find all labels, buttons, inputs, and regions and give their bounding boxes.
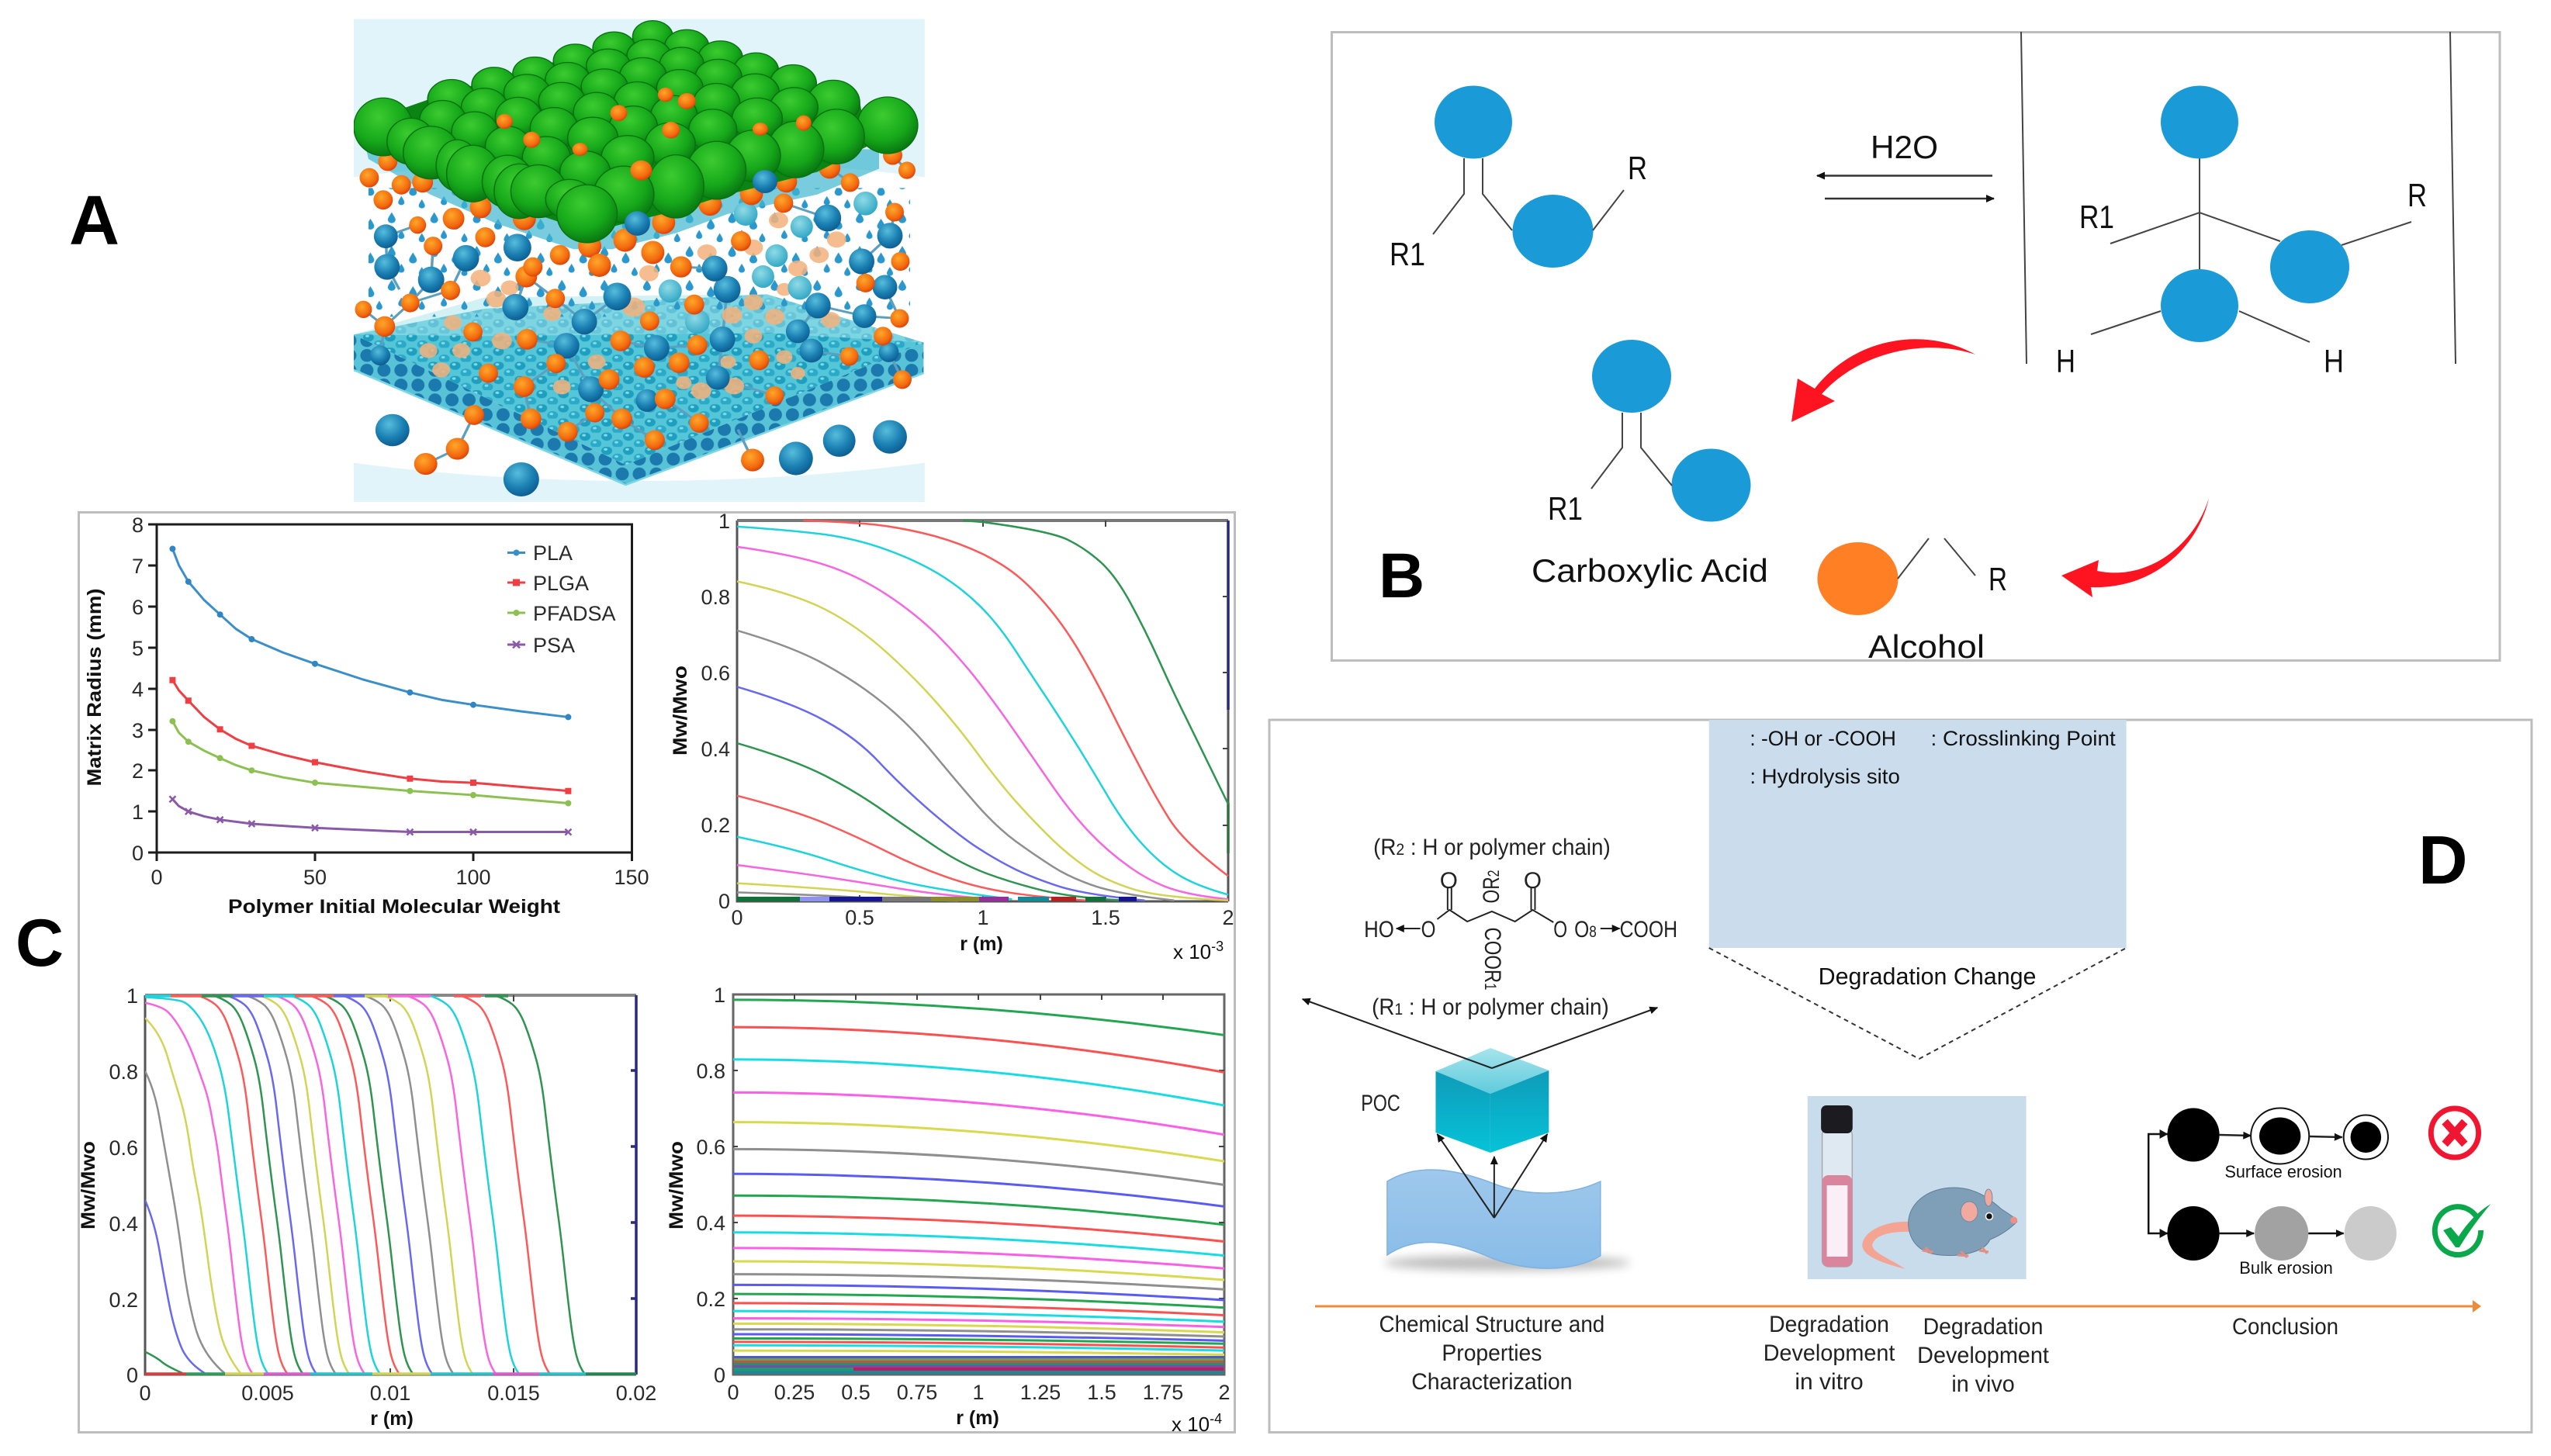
axis titles: r (m)	[960, 933, 1003, 955]
y tick labels: 0.6	[696, 1136, 725, 1159]
x tick labels: 2	[1222, 906, 1234, 929]
x tick labels: 0	[731, 906, 743, 929]
panel A: polymer matrix hydrolysis illustration	[354, 19, 925, 502]
tetrahedral intermediate: H	[2056, 343, 2075, 379]
stage label: chemical structure	[1379, 1312, 1604, 1395]
y tick labels: 0	[714, 1364, 725, 1387]
y tick labels: 1	[132, 801, 144, 824]
x tick labels: 1.5	[1087, 1381, 1116, 1404]
panel D content	[1303, 720, 2127, 1397]
x tick labels: 1.25	[1020, 1381, 1061, 1404]
y tick labels: 3	[132, 719, 144, 742]
y tick labels	[132, 514, 144, 865]
x tick labels: 1	[972, 1381, 985, 1404]
y tick labels: 1	[718, 510, 730, 533]
ester molecule: R1	[1390, 236, 1425, 272]
x tick labels: 0.015	[487, 1382, 540, 1405]
chart: Mw/Mwo vs r, bottom right: Mw/Mwo	[666, 1141, 687, 1229]
orange atoms below the green layer	[355, 146, 916, 475]
blue atoms	[370, 205, 907, 496]
stage label: in vivo: Degradation	[1923, 1314, 2043, 1340]
x tick labels: 0	[139, 1382, 151, 1405]
chart: Mw/Mwo vs r, top right: Mw/Mwo	[670, 666, 691, 756]
icon: red cross	[2431, 1108, 2479, 1157]
alcohol molecule	[1817, 538, 2007, 665]
dense band of curves	[734, 1356, 1224, 1374]
chemical structure of POC: O	[1553, 917, 1567, 942]
icon: green check	[2435, 1204, 2490, 1255]
y tick labels: 0	[126, 1364, 138, 1387]
arrows: substrate to cube	[1437, 1134, 1547, 1218]
degradation change box: : -OH or -COOH	[1750, 727, 1896, 750]
tetrahedral intermediate: R	[2407, 177, 2427, 213]
glass atoms	[625, 170, 777, 236]
arrows: cube to chemical structure	[1303, 999, 1492, 1068]
surface erosion row: Surface erosion	[2225, 1162, 2342, 1181]
curves	[172, 549, 568, 832]
degradation change box: : Hydrolysis sito	[1750, 765, 1900, 788]
panel label: A: A	[69, 182, 119, 260]
legend	[507, 541, 616, 657]
y tick labels	[109, 984, 138, 1387]
chemical structure of POC: (R1 : H or polymer chain)	[1372, 994, 1609, 1020]
POC cube	[1435, 1048, 1549, 1153]
x tick labels: 0	[727, 1381, 739, 1404]
polymer sheet	[354, 294, 923, 485]
tetrahedral intermediate: H	[2324, 343, 2344, 379]
panel C frame	[79, 512, 1235, 1432]
molecular bonds	[363, 155, 907, 464]
degradation change box: : Crosslinking Point	[1931, 727, 2116, 750]
alcohol molecule: Alcohol	[1868, 628, 1985, 665]
y tick labels: 6	[132, 596, 144, 619]
exponent: x 10	[1172, 1413, 1210, 1436]
y tick labels: 0.2	[696, 1288, 725, 1311]
x axis title: Polymer Initial Molecular Weight	[228, 896, 561, 918]
arrow: to alcohol	[2061, 498, 2209, 597]
curves	[737, 520, 1228, 901]
chart: Mw/Mwo vs r, bottom left: Mw/Mwo	[78, 1141, 99, 1229]
ester molecule	[1390, 85, 1647, 272]
x tick labels: 0.75	[897, 1381, 937, 1404]
panel label: B: B	[1379, 541, 1424, 611]
frame	[737, 520, 1228, 901]
x tick labels: 150	[614, 866, 649, 889]
water droplets	[369, 188, 910, 316]
chemical structure of POC: O8	[1574, 917, 1597, 942]
branch connector	[2148, 1134, 2167, 1233]
x tick labels: 0	[151, 866, 163, 889]
x tick labels: 0.01	[370, 1382, 410, 1405]
y tick labels: 5	[132, 637, 144, 660]
alcohol molecule: R	[1989, 561, 2007, 597]
y tick labels: 0.8	[696, 1060, 725, 1083]
chemical structure of POC: O	[1524, 868, 1542, 894]
x tick labels: 2	[1218, 1381, 1231, 1404]
y tick labels: 1	[126, 984, 138, 1008]
chemical structure of POC: OR2	[1479, 870, 1504, 903]
carboxylic acid molecule: Carboxylic Acid	[1532, 552, 1768, 589]
icon: vial	[1821, 1105, 1853, 1267]
panel frame	[1331, 33, 2500, 661]
y tick labels: 4	[132, 678, 144, 701]
legend: PFADSA	[533, 602, 616, 625]
stage label: in vivo	[1917, 1314, 2050, 1397]
axes	[148, 524, 632, 861]
x tick labels	[139, 1382, 656, 1405]
y tick labels: 2	[132, 759, 144, 783]
axis titles: r (m)	[370, 1408, 414, 1430]
chart: Mw/Mwo vs r, top right	[670, 510, 1234, 963]
chemical structure of POC: COOH	[1620, 917, 1677, 942]
bracket lines	[2021, 32, 2456, 364]
stage label: in vivo: in vivo	[1951, 1371, 2015, 1397]
x tick labels	[727, 1381, 1231, 1404]
timeline arrow	[1315, 1305, 2480, 1308]
green backing layer	[405, 62, 867, 227]
panel label: C: C	[16, 906, 64, 980]
y tick labels: 0.6	[701, 662, 730, 685]
stage label: in vitro: Degradation	[1769, 1312, 1889, 1337]
background	[354, 19, 925, 502]
panel label: D: D	[2418, 821, 2468, 898]
tetrahedral intermediate: R1	[2079, 199, 2114, 235]
exponent: -3	[1211, 939, 1224, 954]
chemical structure of POC: HO	[1364, 917, 1394, 942]
wave substrate	[1384, 1170, 1631, 1271]
stage label: chemical structure: Properties	[1442, 1340, 1542, 1366]
frame	[733, 994, 1224, 1375]
H2O equilibrium arrows: H2O	[1871, 129, 1938, 165]
y tick labels: 0.4	[701, 738, 730, 761]
x tick labels: 50	[303, 866, 327, 889]
y tick labels: 0.2	[701, 814, 730, 837]
stage label: in vivo: Development	[1917, 1343, 2050, 1368]
stage label: in vitro	[1764, 1312, 1895, 1395]
chemical structure of POC	[1364, 835, 1677, 1020]
x tick labels: 0.25	[774, 1381, 815, 1404]
legend: PSA	[533, 634, 575, 657]
y tick labels: 0.4	[696, 1212, 725, 1235]
bulk erosion row: Bulk erosion	[2239, 1258, 2333, 1278]
x tick labels	[731, 906, 1234, 929]
y tick labels: 0.4	[109, 1212, 138, 1236]
pale teal atoms	[659, 192, 877, 334]
y tick labels	[701, 510, 730, 913]
stage label: chemical structure: Characterization	[1411, 1369, 1573, 1395]
pale orange atoms	[420, 213, 846, 399]
chemical structure of POC: O	[1421, 917, 1435, 942]
dashed callout lines	[1709, 948, 2127, 1059]
teal fringe under the green layer	[365, 143, 879, 249]
y tick labels: 7	[132, 555, 144, 578]
y tick labels: 8	[132, 514, 144, 537]
baseline band	[145, 996, 636, 1374]
y tick labels: 0.2	[109, 1288, 138, 1312]
bulk erosion row	[2167, 1206, 2397, 1278]
arrow: to carboxylic acid	[1791, 339, 1975, 422]
exponent: -4	[1210, 1411, 1222, 1427]
ester molecule: R	[1628, 150, 1647, 186]
degradation change box	[1709, 720, 2127, 948]
exponent: x 10	[1173, 940, 1211, 963]
y axis title: Matrix Radius (mm)	[84, 588, 106, 787]
x tick labels: 0.5	[841, 1381, 871, 1404]
panel D frame	[1269, 720, 2532, 1432]
legend: PLGA	[533, 572, 589, 595]
chemical structure of POC: (R2 : H or polymer chain)	[1373, 835, 1611, 860]
chemical structure of POC: COOR1	[1480, 928, 1505, 990]
orange atoms on top of the green layer	[497, 88, 812, 180]
green spheres	[354, 21, 918, 243]
chart: matrix radius vs polymer initial molecular weight	[84, 514, 649, 918]
stage label: conclusion: Conclusion	[2232, 1314, 2338, 1340]
carboxylic acid molecule	[1532, 340, 1768, 589]
x tick labels: 0.5	[845, 906, 874, 929]
axis titles: r (m)	[956, 1407, 999, 1429]
surface erosion row	[2167, 1108, 2388, 1181]
in vitro and in vivo image	[1808, 1096, 2027, 1279]
x tick labels: 100	[455, 866, 491, 889]
panel B: ester hydrolysis mechanism	[1331, 32, 2500, 665]
y tick labels: 0.8	[701, 586, 730, 609]
x tick labels: 0.005	[241, 1382, 294, 1405]
curves	[145, 995, 585, 1375]
x tick labels: 0.02	[616, 1382, 656, 1405]
label: POC: POC	[1361, 1091, 1400, 1116]
bottom band	[737, 897, 1137, 901]
erosion diagram	[2148, 1108, 2490, 1278]
y tick labels: 0	[718, 890, 730, 913]
curves	[733, 1000, 1224, 1355]
tetrahedral intermediate	[2056, 85, 2427, 379]
icon: rat	[1862, 1188, 2017, 1269]
y tick labels: 0.8	[109, 1060, 138, 1084]
x tick labels: 1.75	[1143, 1381, 1183, 1404]
chart: Mw/Mwo vs r, bottom right	[666, 984, 1231, 1436]
stage label: in vitro: in vitro	[1795, 1369, 1864, 1395]
stage label: chemical structure: Chemical Structure and	[1379, 1312, 1604, 1337]
x tick labels: 1.5	[1091, 906, 1120, 929]
legend: PLA	[533, 541, 573, 565]
y tick labels: 1	[714, 984, 725, 1007]
y tick labels: 0.6	[109, 1136, 138, 1160]
x tick labels: 1	[977, 906, 989, 929]
stage label: in vitro: Development	[1764, 1340, 1895, 1366]
y tick labels: 0	[132, 842, 144, 865]
x tick labels	[151, 866, 649, 889]
data markers	[169, 549, 571, 835]
chart: Mw/Mwo vs r, bottom left	[78, 984, 656, 1430]
chemical structure of POC: O	[1440, 868, 1458, 894]
y tick labels	[696, 984, 725, 1387]
carboxylic acid molecule: R1	[1548, 490, 1583, 527]
frame	[145, 995, 636, 1375]
label: Degradation Change: Degradation Change	[1819, 963, 2036, 990]
